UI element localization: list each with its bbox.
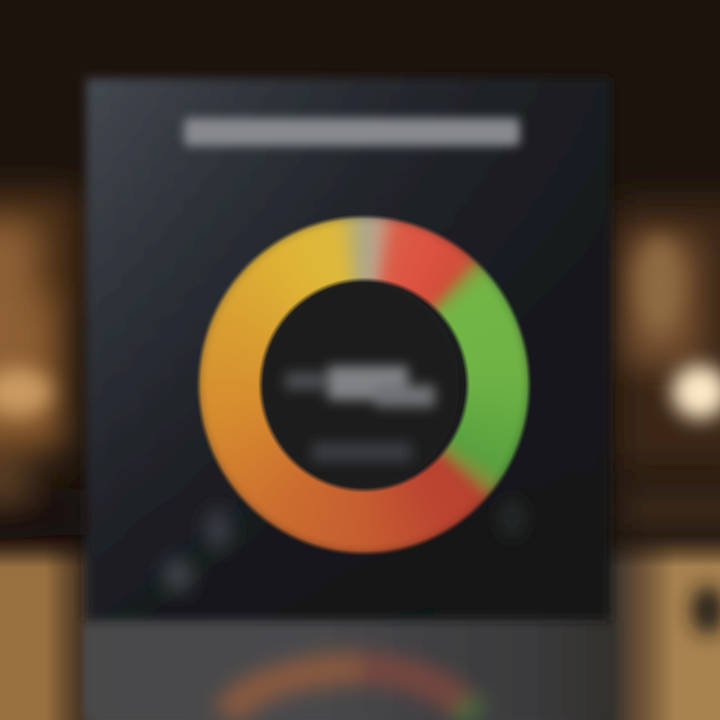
floor reflection (84, 622, 614, 720)
chart centre: dark hole (256, 275, 464, 495)
panel: dark board (86, 78, 610, 620)
donut chart ring (196, 214, 532, 556)
title: illegible blurred heading bar (184, 118, 520, 146)
legend marks: faint blurred icons (164, 500, 522, 592)
centre label: illegible blurred value (285, 366, 435, 462)
